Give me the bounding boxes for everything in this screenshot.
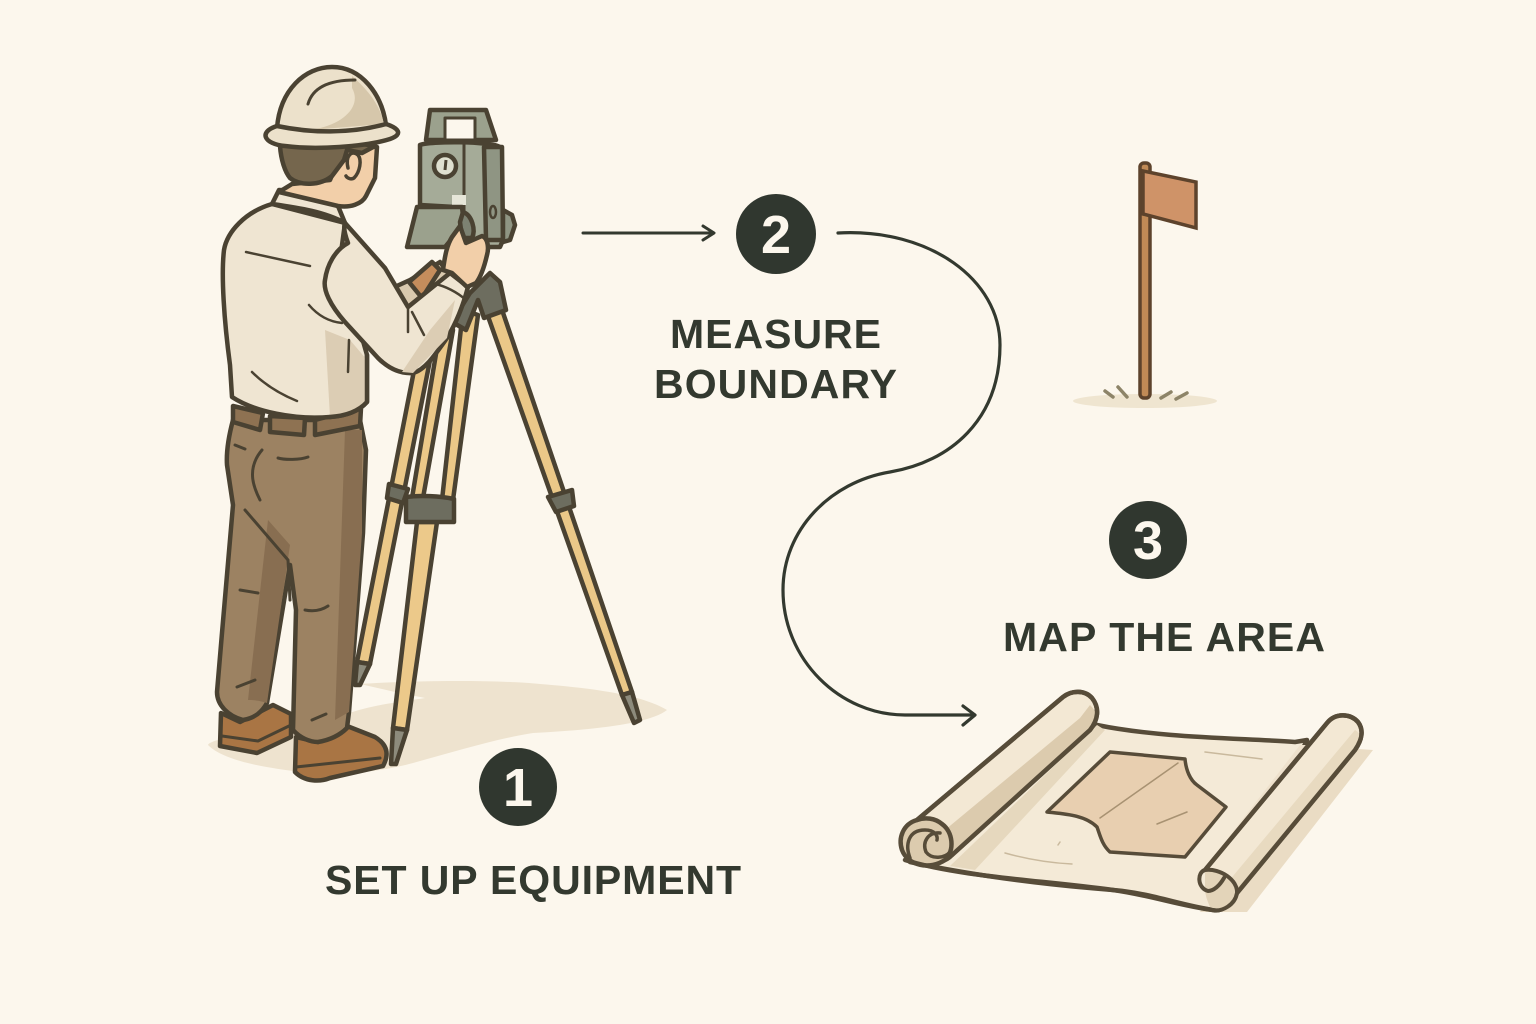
tripod middle rail bbox=[412, 330, 453, 498]
near hand bbox=[443, 226, 488, 287]
boundary parcel bbox=[1047, 752, 1226, 857]
step 1 label: SET UP EQUIPMENT bbox=[325, 857, 741, 903]
step 1 badge: 1 bbox=[503, 758, 533, 818]
knob bbox=[460, 212, 474, 238]
tripod front rail bbox=[442, 310, 478, 500]
step 2 label: MEASURE bbox=[670, 311, 881, 357]
flag ground patch bbox=[1073, 394, 1217, 408]
map sheet bbox=[910, 725, 1307, 910]
map cast shadow bbox=[1200, 745, 1373, 912]
bottom paper edge bbox=[905, 860, 1237, 910]
right boot bbox=[295, 726, 387, 780]
step 2 badge: 2 bbox=[761, 205, 791, 265]
step 2 label: BOUNDARY bbox=[654, 361, 897, 407]
roll shadow on sheet bbox=[950, 725, 1105, 870]
far arm bbox=[388, 262, 450, 330]
tripod leg clamps bbox=[387, 484, 574, 522]
step 3 label: MAP THE AREA bbox=[1003, 614, 1325, 660]
flag marker bbox=[1073, 163, 1217, 408]
tripod head bbox=[452, 273, 506, 330]
step 1 badge bbox=[479, 748, 557, 826]
step 3 badge: 3 bbox=[1133, 511, 1163, 571]
hard hat bbox=[266, 67, 398, 148]
flag pole bbox=[1140, 163, 1150, 398]
shirt sleeve bbox=[309, 223, 468, 373]
arrow from step 1 to step 2 bbox=[583, 226, 714, 240]
shirt torso bbox=[223, 204, 367, 418]
total station instrument bbox=[407, 110, 515, 287]
step 2 label bbox=[654, 311, 897, 407]
left roll bbox=[901, 692, 1097, 865]
left boot bbox=[220, 705, 291, 753]
far hand bbox=[409, 262, 440, 298]
instrument handle bbox=[426, 110, 496, 140]
instrument base wedge bbox=[407, 207, 464, 247]
step 2 badge bbox=[736, 194, 816, 274]
paper creases bbox=[1005, 752, 1262, 864]
step 3 badge bbox=[1109, 501, 1187, 579]
tripod left leg bbox=[355, 340, 434, 685]
grass ticks bbox=[1105, 387, 1187, 399]
tripod lower front leg bbox=[391, 522, 437, 764]
trousers bbox=[217, 420, 366, 742]
shirt collar bbox=[272, 190, 345, 223]
belt bbox=[233, 406, 361, 435]
ear bbox=[346, 153, 360, 179]
boot soles bbox=[222, 726, 380, 767]
instrument body bbox=[420, 142, 515, 247]
right roll shadow bbox=[1205, 745, 1312, 880]
ground shadow under surveyor bbox=[208, 681, 667, 774]
neck and face bbox=[279, 145, 377, 207]
hair bbox=[280, 142, 375, 184]
curved arrow from step 2 to step 3 bbox=[783, 233, 1000, 725]
surveyor figure bbox=[217, 67, 468, 780]
tripod bbox=[355, 273, 640, 764]
flag cloth bbox=[1143, 171, 1196, 228]
tripod right leg bbox=[484, 298, 640, 723]
right roll bbox=[1199, 715, 1362, 910]
map scroll bbox=[901, 692, 1373, 912]
